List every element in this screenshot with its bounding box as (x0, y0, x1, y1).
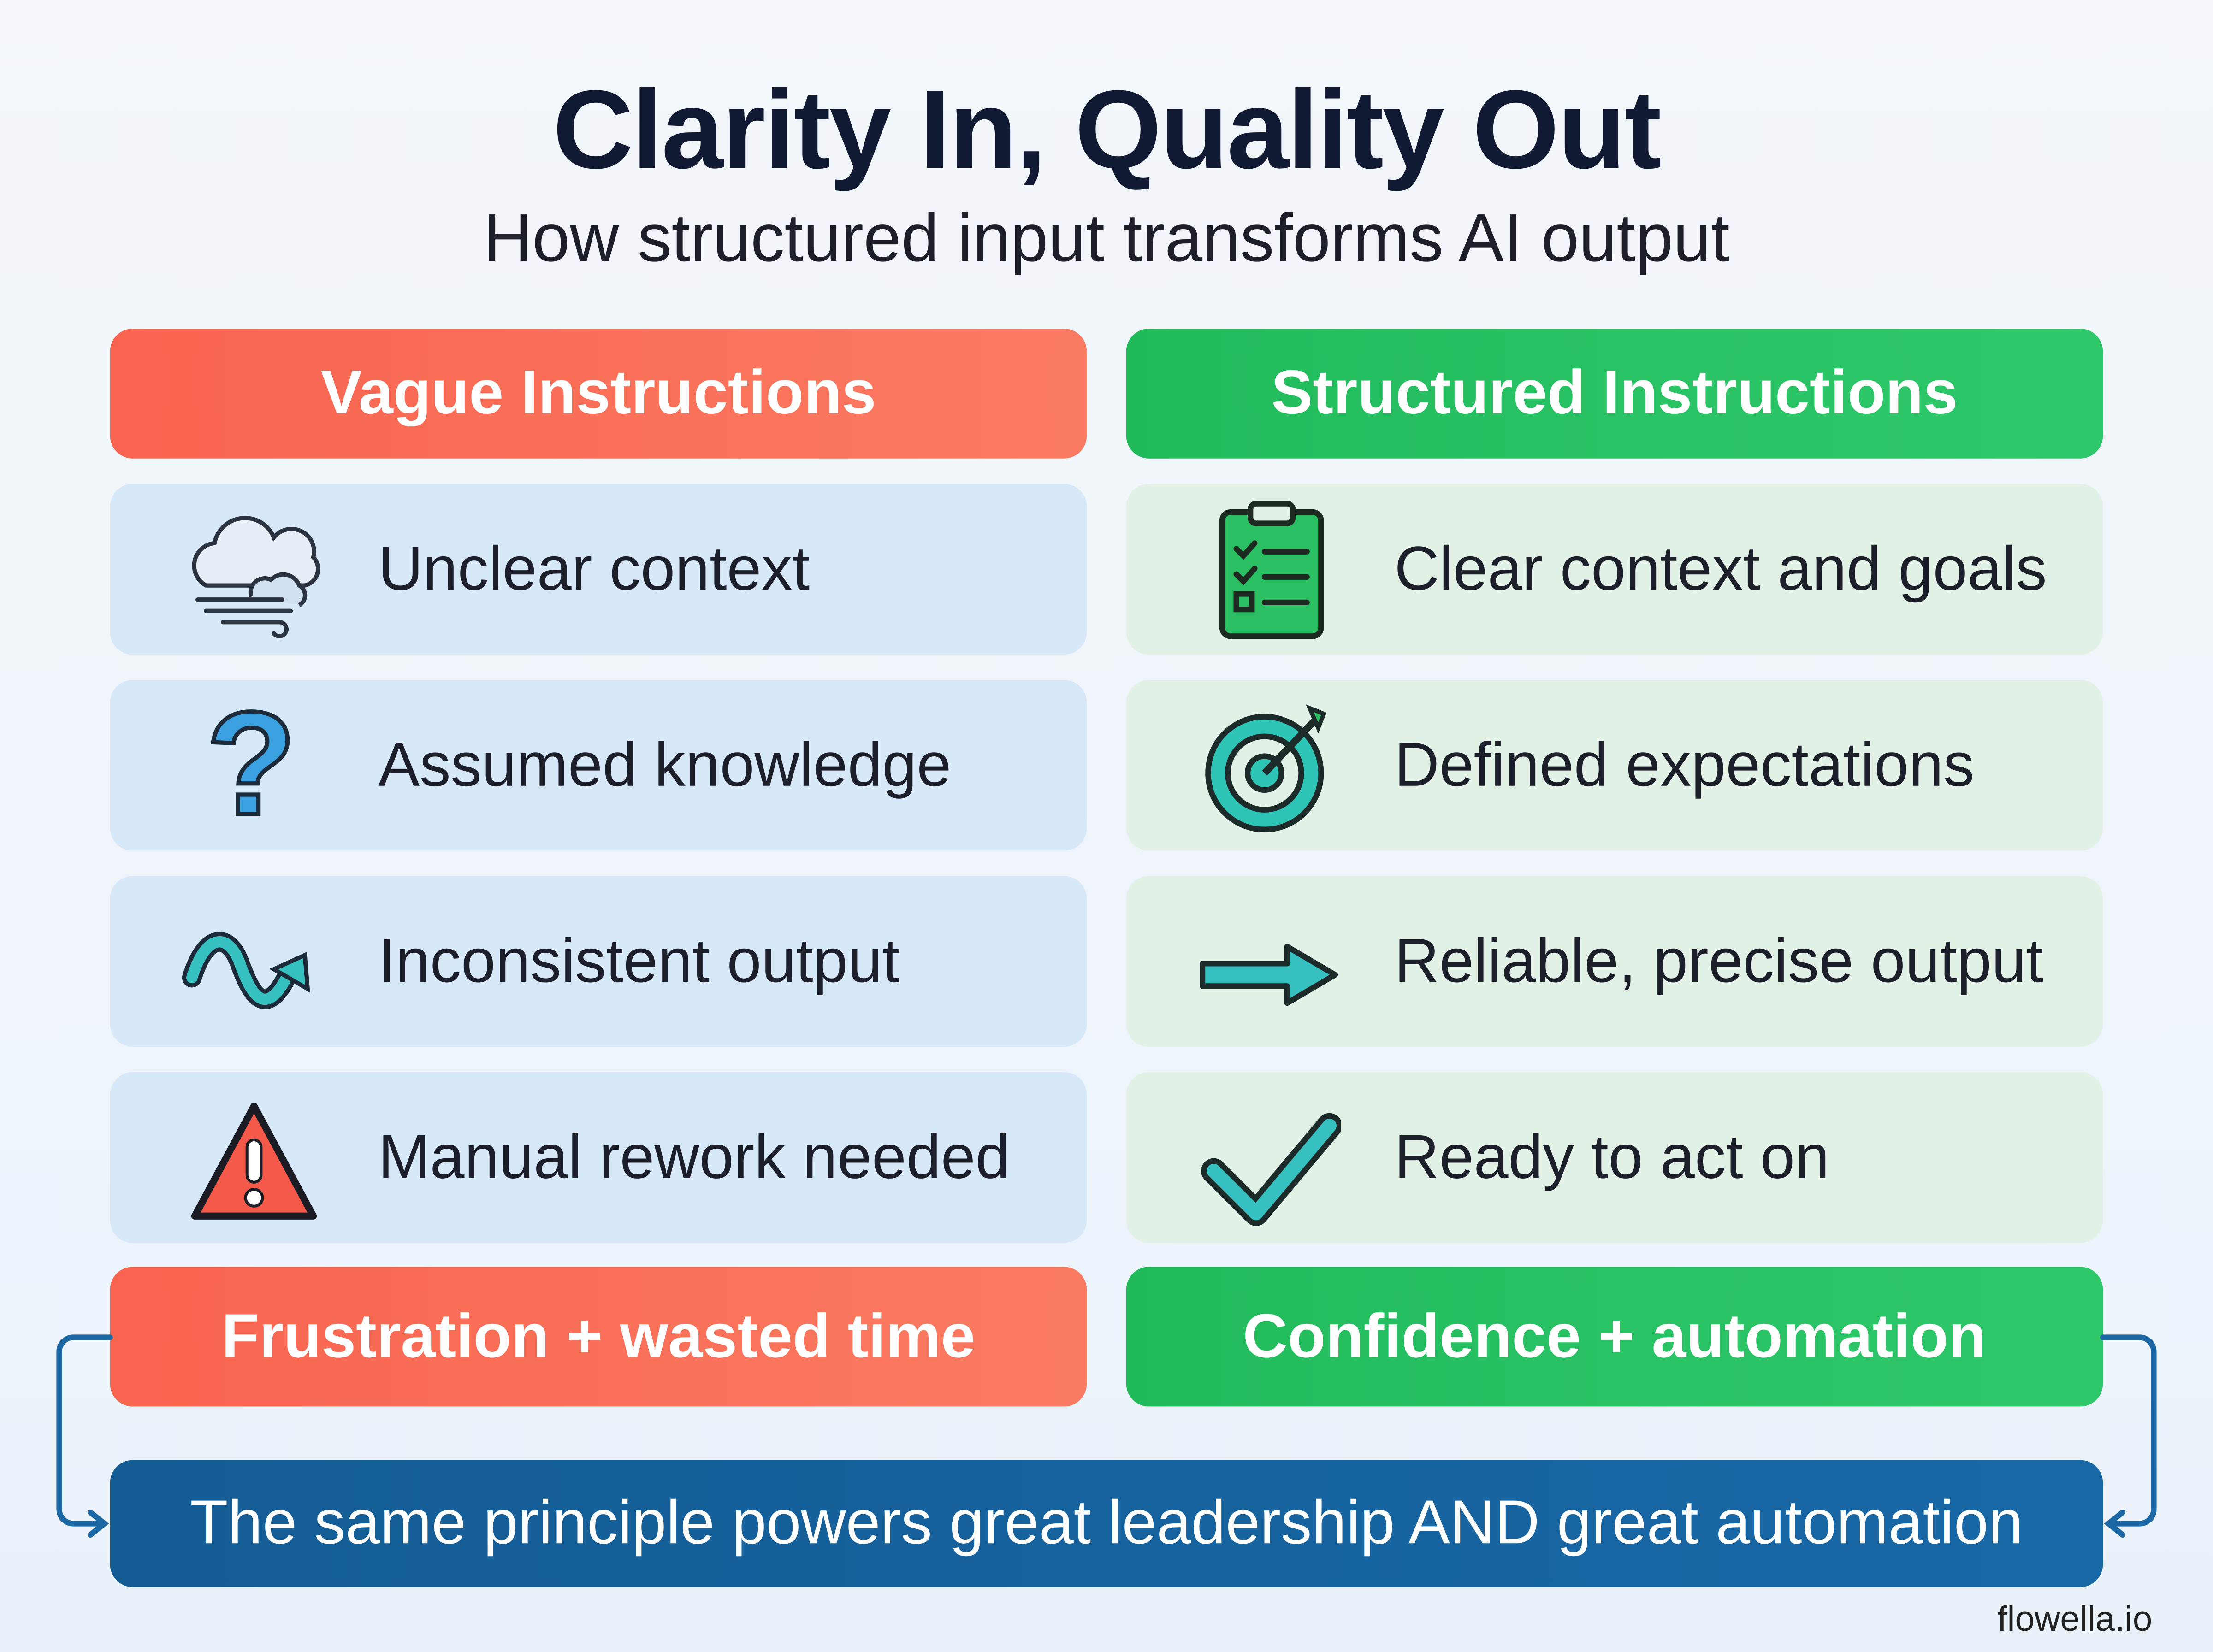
result: confidence (1126, 1267, 2103, 1406)
row: reliable output (1126, 876, 2103, 1047)
header: structured (1126, 329, 2103, 459)
row: ready to act (1126, 1072, 2103, 1243)
title: Clarity In, Quality Out (553, 66, 1660, 192)
icon: check (1200, 1086, 1341, 1227)
text: Inconsistent output (378, 927, 899, 996)
row: inconsistent output (110, 876, 1087, 1047)
text: Unclear context (378, 535, 810, 604)
header: vague (110, 329, 1087, 459)
banner: principle: The same principle powers great leadership AND great automation (190, 1488, 2023, 1558)
result: frustration (110, 1267, 1087, 1406)
text: Ready to act on (1394, 1123, 1829, 1192)
icon: arrow right (1197, 890, 1338, 1031)
row: manual rework (110, 1072, 1087, 1243)
text: Defined expectations (1394, 731, 1974, 800)
row: clear context (1126, 484, 2103, 655)
text: Clear context and goals (1394, 535, 2047, 604)
icon: cloud (181, 498, 322, 639)
subtitle: How structured input transforms AI output (483, 202, 1730, 277)
icon: warning (186, 1086, 327, 1227)
arrow: right connector (2086, 1319, 2171, 1545)
row: assumed knowledge (110, 680, 1087, 851)
text: Assumed knowledge (378, 731, 951, 800)
icon: question: ? (207, 683, 296, 846)
banner: principle (110, 1460, 2103, 1587)
row: defined expectations (1126, 680, 2103, 851)
result: frustration: Frustration + wasted time (221, 1301, 976, 1370)
text: Manual rework needed (378, 1123, 1010, 1192)
header: vague: Vague Instructions (320, 358, 876, 427)
result: confidence: Confidence + automation (1243, 1301, 1986, 1370)
arrow: left connector (42, 1319, 127, 1545)
text: Reliable, precise output (1394, 927, 2043, 996)
row: unclear context (110, 484, 1087, 655)
header: structured: Structured Instructions (1271, 358, 1958, 427)
icon: clipboard (1200, 498, 1341, 639)
icon: target (1197, 694, 1338, 835)
footer: brand: flowella.io (1997, 1600, 2152, 1639)
icon: squiggle arrow (181, 890, 322, 1031)
